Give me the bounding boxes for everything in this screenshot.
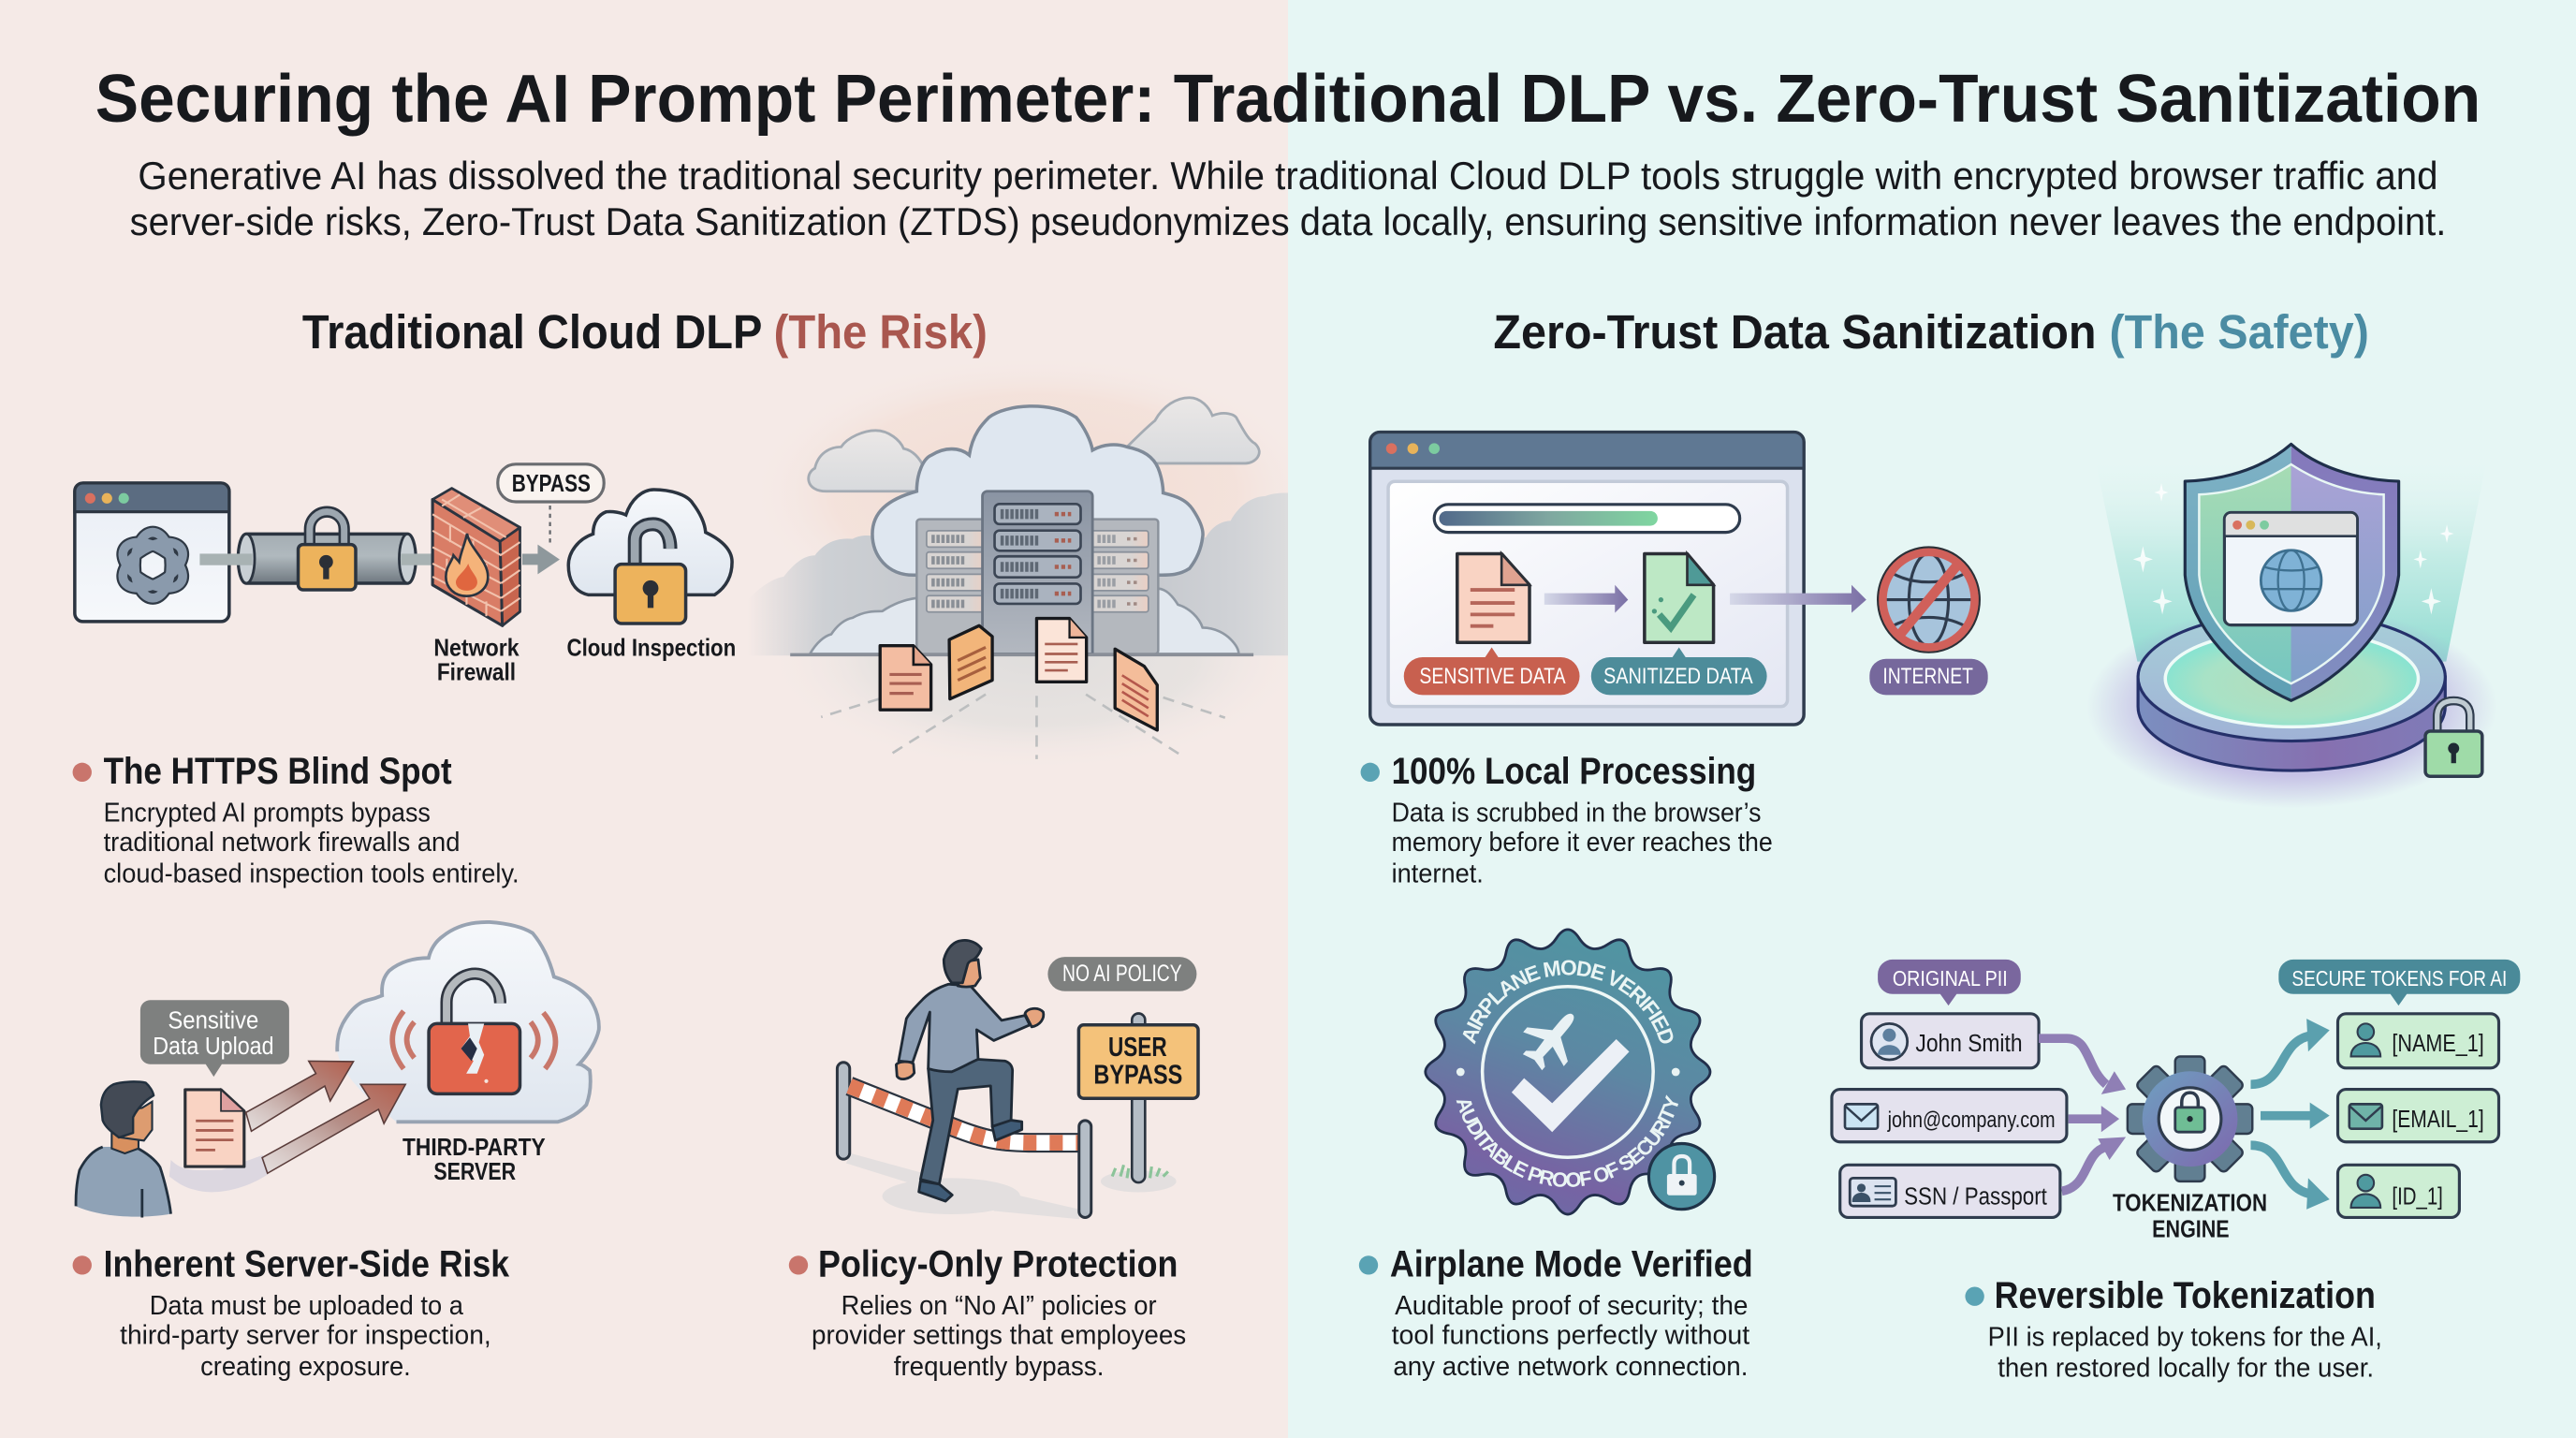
- barrier tape: [849, 1086, 1079, 1143]
- text block: Policy-Only Protection: Policy-Only Protection: [818, 1244, 1178, 1285]
- input: email: john@company.com: [1887, 1108, 2056, 1133]
- icon: document: [185, 1090, 244, 1167]
- input: John Smith: John Smith: [1915, 1029, 2023, 1057]
- text block: The HTTPS Blind Spot: Encrypted AI prompts bypass: [104, 799, 431, 829]
- text block: Reversible Tokenization: Reversible Tokenization: [1995, 1275, 2376, 1316]
- icon: browser window with AI knot: [75, 483, 229, 622]
- text block: Reversible Tokenization: [1965, 1275, 2382, 1384]
- text block: The HTTPS Blind Spot: traditional network firewalls and: [104, 828, 460, 858]
- label: third-party server: SERVER: [433, 1159, 516, 1185]
- icon: sensitive document: [1457, 553, 1530, 642]
- text block: The HTTPS Blind Spot: cloud-based inspection tools entirely.: [104, 858, 520, 888]
- label: third-party server: THIRD-PARTY: [402, 1135, 546, 1161]
- input: SSN: [1840, 1165, 2060, 1217]
- barrier left post: [837, 1063, 850, 1159]
- sparkles: [2133, 483, 2453, 614]
- back cloud right: [1150, 493, 1288, 655]
- diagram: HTTPS traffic bypassing firewall: [75, 464, 736, 686]
- ground shadows: [846, 1153, 1177, 1219]
- text block: 100% Local Processing: Data is scrubbed in the browser’s: [1392, 799, 1761, 829]
- label: sensitive data: SENSITIVE DATA: [1419, 665, 1566, 689]
- server rack centre: [983, 492, 1092, 654]
- text block: Airplane Mode Verified: [1359, 1244, 1753, 1382]
- text block: Reversible Tokenization: then restored locally for the user.: [1998, 1354, 2374, 1384]
- illustration: user stepping over policy barrier: [837, 940, 1198, 1219]
- badge side dots: [1456, 1068, 1680, 1076]
- background: risk side: [0, 0, 1288, 1438]
- label: cloud inspection: Cloud Inspection: [567, 635, 736, 661]
- icon: airplane: [1512, 997, 1593, 1079]
- label: original PII: ORIGINAL PII: [1893, 966, 2008, 990]
- label: secure tokens for AI: SECURE TOKENS FOR AI: [2291, 966, 2507, 990]
- icon: lock seal: [1648, 1143, 1715, 1210]
- icon: green lock: [2425, 701, 2482, 776]
- background: safety side: [1288, 0, 2576, 1438]
- server rack left: [916, 520, 986, 654]
- text block: 100% Local Processing: 100% Local Processing: [1392, 751, 1756, 792]
- arrow: sanitize: [1544, 585, 1628, 613]
- small cloud top left: [809, 431, 944, 492]
- back cloud left: [748, 536, 920, 655]
- text block: Policy-Only Protection: frequently bypass.: [894, 1352, 1104, 1382]
- callout: sensitive data upload: Sensitive: [168, 1005, 258, 1034]
- platform: [2086, 605, 2497, 808]
- encrypted tunnel with lock: [199, 512, 446, 590]
- label: internet: [1869, 659, 1988, 695]
- label: tokenization engine: ENGINE: [2152, 1217, 2230, 1243]
- heading: Traditional Cloud DLP: Traditional Cloud DLP: [302, 305, 762, 359]
- browser window: [1370, 433, 1804, 725]
- text block: The HTTPS Blind Spot: [73, 751, 520, 888]
- label: tokenization engine: [2113, 1190, 2267, 1243]
- arrow: bypass direction: [522, 545, 560, 574]
- lilac shadow swoosh: [169, 1155, 270, 1192]
- label: BYPASS: BYPASS: [512, 471, 591, 497]
- label: sensitive data: [1404, 647, 1580, 695]
- illustration: server-side upload: [76, 922, 599, 1217]
- document 3: [1036, 619, 1087, 682]
- label: sanitized data: SANITIZED DATA: [1603, 665, 1753, 689]
- intro text: [130, 154, 2446, 243]
- illustration: cloud servers and leaking documents: [748, 353, 1323, 772]
- text block: 100% Local Processing: internet.: [1392, 858, 1484, 888]
- token: id: [2338, 1165, 2459, 1217]
- server rack right: [1090, 520, 1158, 654]
- text block: Inherent Server-Side Risk: [73, 1244, 509, 1382]
- document 1: [880, 646, 931, 710]
- icon: person stepping over: [896, 940, 1044, 1201]
- heading: Traditional Cloud DLP: (The Risk): [774, 305, 988, 359]
- text block: Inherent Server-Side Risk: third-party server for inspection,: [120, 1321, 491, 1351]
- illustration: shield on platform: [2086, 444, 2497, 808]
- token: name: [NAME_1]: [2392, 1029, 2484, 1057]
- label: BYPASS: [498, 464, 604, 543]
- text block: Policy-Only Protection: Relies on “No AI” policies or: [842, 1291, 1157, 1321]
- text block: The HTTPS Blind Spot: The HTTPS Blind Spot: [104, 751, 452, 792]
- small cloud top right: [1127, 398, 1259, 463]
- label: no AI policy: NO AI POLICY: [1062, 961, 1182, 987]
- badge: Airplane Mode Verified: [1424, 929, 1717, 1215]
- input: SSN: SSN / Passport: [1904, 1181, 2047, 1210]
- arrows: engine to tokens: [2250, 1019, 2330, 1210]
- input: John Smith: [1862, 1014, 2039, 1068]
- label: network firewall: [433, 635, 520, 686]
- text block: Airplane Mode Verified: Auditable proof of security; the: [1395, 1291, 1748, 1321]
- text block: Airplane Mode Verified: tool functions perfectly without: [1392, 1321, 1749, 1351]
- heading: Zero-Trust Data Sanitization: Zero-Trust Data Sanitization: [1493, 305, 2097, 359]
- input: email: [1832, 1090, 2067, 1142]
- text block: Policy-Only Protection: provider settings that employees: [812, 1321, 1186, 1351]
- mini browser with globe: [2224, 512, 2357, 625]
- text block: Inherent Server-Side Risk: Data must be uploaded to a: [150, 1291, 464, 1321]
- label: internet: INTERNET: [1882, 665, 1973, 689]
- dashed radiating lines: [821, 695, 1225, 759]
- text block: Policy-Only Protection: [789, 1244, 1186, 1382]
- token: email: [EMAIL_1]: [2392, 1105, 2484, 1133]
- sign: user bypass: [1078, 1014, 1198, 1182]
- icon: blocked internet: [1878, 547, 1980, 653]
- progress bar: [1434, 505, 1740, 533]
- text block: 100% Local Processing: [1361, 751, 1773, 888]
- document 2: [949, 625, 992, 699]
- label: network firewall: Firewall: [437, 660, 516, 686]
- diagram: tokenization flow: [1832, 960, 2520, 1243]
- text block: Reversible Tokenization: PII is replaced by tokens for the AI,: [1988, 1322, 2382, 1352]
- arrow: to internet: [1730, 585, 1866, 613]
- label: sanitized data: [1591, 647, 1767, 695]
- icon: sanitized document: [1645, 553, 1714, 642]
- sign: user bypass: USER: [1108, 1033, 1167, 1063]
- label: tokenization engine: TOKENIZATION: [2113, 1190, 2267, 1216]
- callout: sensitive data upload: [140, 1000, 289, 1077]
- label: network firewall: Network: [433, 635, 520, 661]
- text block: Inherent Server-Side Risk: creating exposure.: [200, 1352, 411, 1382]
- badge text: top: AIRPLANE MODE VERIFIED: [1462, 961, 1674, 1045]
- arrow: upload bottom: [262, 1084, 405, 1173]
- sign: user bypass: BYPASS: [1093, 1060, 1182, 1090]
- light beam: [2094, 452, 2488, 662]
- document 4: [1115, 649, 1157, 730]
- icon: tokenization gear: [2128, 1056, 2252, 1181]
- label: no AI policy: [1047, 957, 1196, 991]
- text block: Inherent Server-Side Risk: Inherent Server-Side Risk: [104, 1244, 509, 1285]
- title: Securing the AI Prompt Perimeter: Traditional DLP vs. Zero-Trust Sanitization: [95, 62, 2481, 137]
- icon: person: [76, 1081, 171, 1217]
- label: original PII: [1878, 960, 2021, 1005]
- icon: cloud with open lock: [568, 490, 732, 624]
- ground line: [790, 653, 1253, 655]
- lower white clouds: [810, 598, 916, 654]
- barrier right post: [1079, 1121, 1091, 1217]
- icon: network firewall with flame: [432, 489, 520, 625]
- icon: third-party cloud with broken lock: [337, 922, 599, 1122]
- text block: 100% Local Processing: memory before it ever reaches the: [1392, 828, 1773, 858]
- token: id: [ID_1]: [2392, 1181, 2443, 1210]
- text block: Airplane Mode Verified: Airplane Mode Verified: [1390, 1244, 1753, 1285]
- label: secure tokens for AI: [2278, 960, 2520, 1005]
- callout: sensitive data upload: Data Upload: [153, 1032, 274, 1060]
- label: third-party server: [402, 1135, 546, 1185]
- heading: Zero-Trust Data Sanitization: (The Safety): [2110, 305, 2369, 359]
- intro text: server-side risks, Zero-Trust Data Sanitization (ZTDS) pseudonymizes data locally, ensuring sensitive information never leaves the endpoint.: [130, 200, 2446, 243]
- token: email: [2338, 1090, 2499, 1142]
- text block: Airplane Mode Verified: any active network connection.: [1393, 1352, 1748, 1382]
- token: name: [2338, 1014, 2499, 1068]
- arrows: input to engine: [2039, 1038, 2126, 1191]
- arrow: upload top: [246, 1061, 354, 1131]
- intro text: Generative AI has dissolved the traditional security perimeter. While traditional Cloud DLP tools struggle with encrypted browser traffic and: [138, 154, 2438, 198]
- diagram: local sanitization in browser: [1370, 433, 1988, 725]
- icon: checkmark: [1512, 1039, 1630, 1132]
- badge text: bottom: AUDITABLE PROOF OF SECURITY: [1456, 1095, 1678, 1187]
- main cloud: [872, 406, 1203, 575]
- shield: [2185, 444, 2399, 700]
